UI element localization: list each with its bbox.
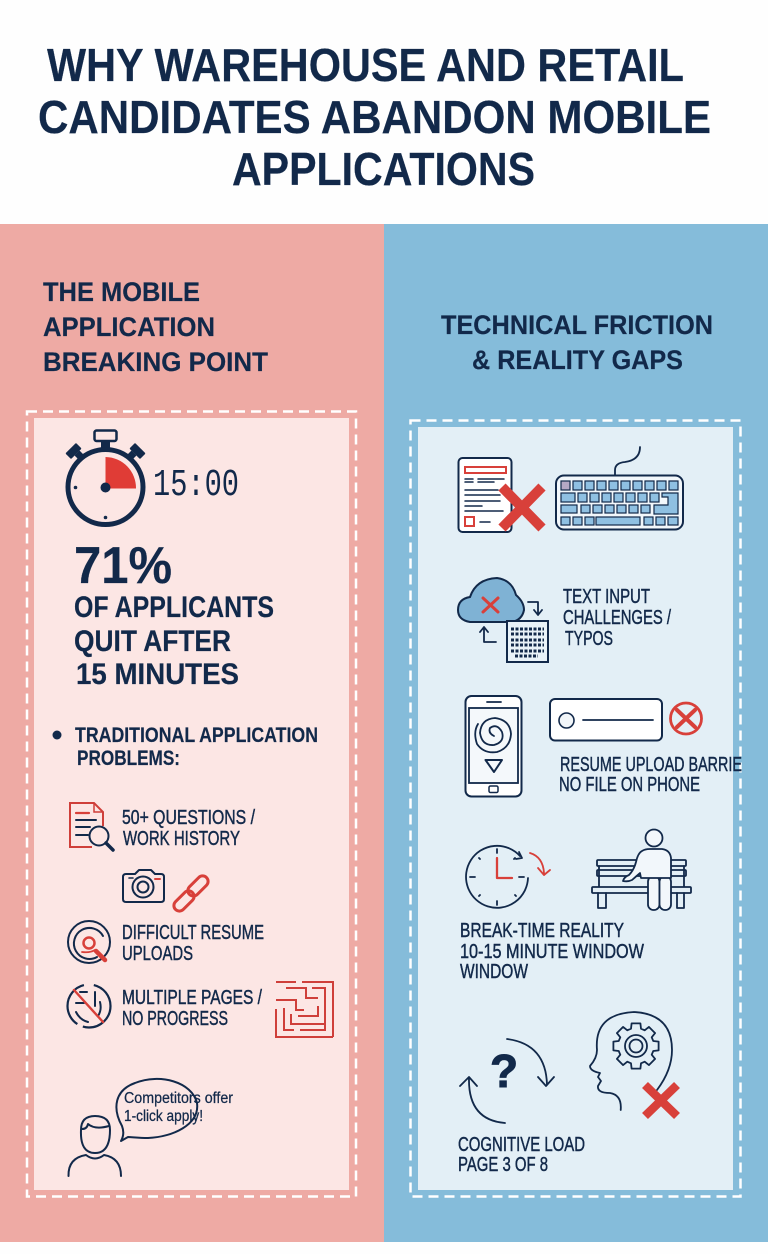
text: text input challenges: TYPOS <box>565 628 613 650</box>
icon: chain link <box>172 874 210 913</box>
text: break-time reality <box>460 920 644 983</box>
statistic caption: OF APPLICANTS <box>74 591 274 624</box>
icon: form document with red cross <box>458 458 542 532</box>
statistic caption: QUIT AFTER <box>74 625 231 658</box>
icon: head with gear and cross <box>590 1012 677 1116</box>
text: resume upload barrier <box>559 754 742 796</box>
icon: question mark with cycle arrows <box>460 1039 554 1123</box>
heading: breaking point: THE MOBILE <box>43 277 200 307</box>
callout: competitors offer 1-click apply: Competitors offer <box>124 1090 233 1107</box>
text: break-time reality: BREAK-TIME REALITY <box>460 920 624 942</box>
icon: cloud with failed upload <box>458 578 548 662</box>
icon: question mark with cycle arrows: ? <box>490 1045 518 1097</box>
icon: camera <box>123 870 164 902</box>
title: APPLICATIONS <box>232 143 535 195</box>
text: cognitive load <box>458 1134 585 1176</box>
icon: stopwatch <box>65 430 146 524</box>
icon: person <box>68 1116 121 1176</box>
icon: maze <box>276 982 333 1037</box>
icon: at-sign target search <box>68 921 110 963</box>
text: break-time reality: 10-15 MINUTE WINDOW <box>460 941 644 963</box>
icon: no progress dial <box>68 984 110 1028</box>
statistic caption <box>74 591 274 691</box>
bullet heading: traditional application problems: PROBLEMS: <box>77 746 180 770</box>
statistic caption: 15 MINUTES <box>76 658 239 691</box>
panel: the mobile application breaking point <box>0 224 384 1242</box>
icon: keyboard <box>556 447 683 530</box>
heading: technical friction <box>441 310 713 375</box>
text: cognitive load: COGNITIVE LOAD <box>458 1134 585 1156</box>
text: questions and work history: WORK HISTORY <box>123 828 240 850</box>
text: multiple pages no progress: MULTIPLE PAGES / <box>122 987 262 1009</box>
heading: technical friction: & REALITY GAPS <box>472 345 683 375</box>
text: text input challenges <box>563 586 671 650</box>
icon: wall clock with red arrow <box>466 846 550 908</box>
callout: competitors offer 1-click apply: 1-click apply! <box>124 1108 203 1125</box>
text: multiple pages no progress: NO PROGRESS <box>122 1008 228 1030</box>
stopwatch time: 15:00 <box>153 464 239 507</box>
text: questions and work history: 50+ QUESTIONS / <box>122 807 255 829</box>
text: text input challenges: TEXT INPUT <box>563 586 650 608</box>
icon: phone with spinner <box>466 696 522 796</box>
text: difficult resume uploads: DIFFICULT RESUME <box>122 922 264 944</box>
heading: breaking point <box>43 277 268 377</box>
text: cognitive load: PAGE 3 OF 8 <box>458 1154 548 1176</box>
text: difficult resume uploads <box>122 922 264 965</box>
panel: technical friction and reality gaps <box>384 224 768 1242</box>
icon: document with magnifier <box>70 803 113 850</box>
heading: breaking point: APPLICATION <box>43 312 215 342</box>
callout: competitors offer 1-click apply <box>116 1079 233 1141</box>
heading: breaking point: BREAKING POINT <box>43 347 268 377</box>
title <box>38 39 711 195</box>
text: resume upload barrier: NO FILE ON PHONE <box>559 774 700 796</box>
text: break-time reality: WINDOW <box>460 961 528 983</box>
card: left content <box>34 418 349 1190</box>
statistic: 71%: 71% <box>74 537 172 595</box>
title: CANDIDATES ABANDON MOBILE <box>38 91 711 143</box>
title: WHY WAREHOUSE AND RETAIL <box>47 39 684 91</box>
bullet heading: traditional application problems: TRADITIONAL APPLICATION <box>75 723 318 747</box>
text: difficult resume uploads: UPLOADS <box>122 943 193 965</box>
text: text input challenges: CHALLENGES / <box>563 607 671 629</box>
heading: technical friction: TECHNICAL FRICTION <box>441 310 713 340</box>
bullet heading: traditional application problems <box>52 723 318 770</box>
icon: person on bench <box>592 830 691 910</box>
text: questions and work history <box>122 807 255 850</box>
icon: upload field with error <box>550 699 702 740</box>
text: multiple pages no progress <box>122 987 262 1030</box>
card: right content <box>418 427 733 1190</box>
